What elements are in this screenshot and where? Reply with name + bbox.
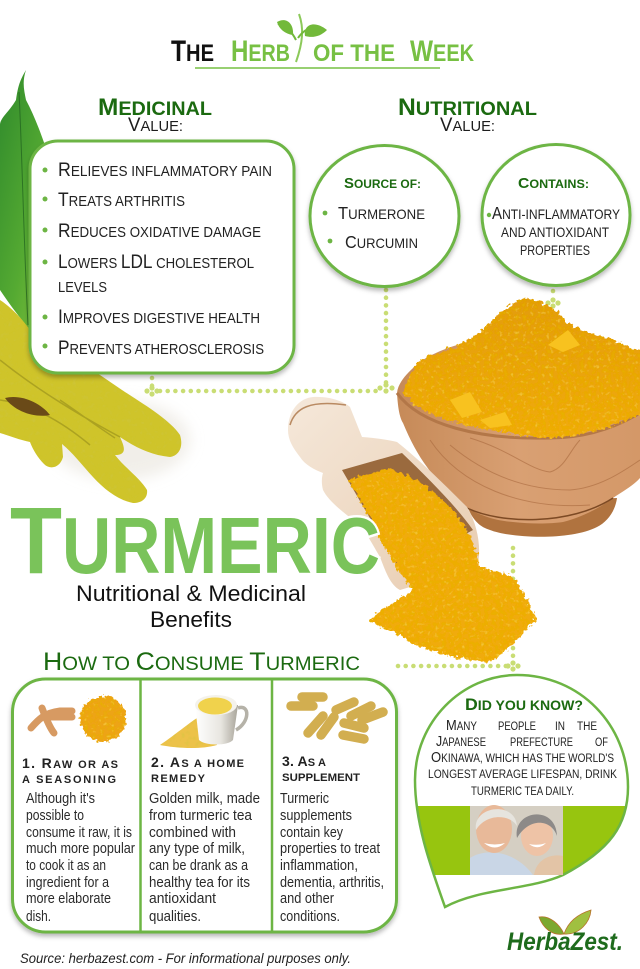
column 2: as a home remedy: any type of milk, (149, 841, 245, 857)
title: The Herb of the Week: THE (171, 35, 214, 68)
column 3: as a supplement: 3. AS A (282, 753, 326, 769)
icon: sprout (277, 14, 327, 62)
panel: medicinal value list: TREATS ARTHRITIS (58, 190, 185, 211)
panel: contains circle (482, 144, 630, 286)
dotted connectors (144, 290, 561, 672)
title: The Herb of the Week: OF THE (313, 40, 395, 67)
column 1: raw or as a seasoning: much more popular (26, 841, 135, 857)
subtitle: Benefits (150, 607, 232, 632)
column 2: as a home remedy: antioxidant (149, 891, 216, 907)
heading: How to Consume Turmeric: HOW TO CONSUME TURMERIC (43, 648, 360, 676)
callout: did you know: PEOPLE (498, 721, 536, 733)
callout: did you know: OF (595, 737, 608, 749)
panel: source of circle: TURMERONE (338, 203, 425, 223)
image: wooden bowl of turmeric (397, 298, 640, 537)
callout: did you know: JAPANESE (436, 733, 486, 750)
panel: source of circle: CURCUMIN (345, 232, 418, 252)
panel: medicinal value list: LEVELS (58, 280, 107, 296)
column 2: as a home remedy: Golden milk, made (149, 791, 260, 807)
panel: medicinal value list: RELIEVES INFLAMMATORY PAIN (58, 160, 272, 181)
panel: medicinal value list: REDUCES OXIDATIVE DAMAGE (58, 221, 261, 242)
logo: HerbaZest (507, 910, 623, 956)
panel: source of circle (310, 146, 459, 286)
image: elderly couple photo (470, 805, 563, 875)
column 1: raw or as a seasoning: dish. (26, 909, 51, 925)
callout: did you know: MANY (446, 717, 477, 734)
callout: did you know: DID YOU KNOW? (465, 695, 583, 714)
title: The Herb of the Week (171, 35, 474, 68)
source note: Source: herbazest.com - For informational purposes only. (20, 950, 351, 966)
column 3: as a supplement: dementia, arthritis, (280, 875, 384, 891)
callout: did you know: TURMERIC TEA DAILY. (471, 786, 574, 798)
column 3: as a supplement: SUPPLEMENT (282, 772, 360, 784)
callout: did you know: IN (555, 721, 565, 733)
subtitle (76, 581, 306, 632)
title: The Herb of the Week: WEEK (410, 35, 474, 68)
panel: how to consume (12, 679, 396, 932)
column 2: as a home remedy: can be drank as a (149, 858, 249, 874)
heading: Medicinal Value (98, 94, 212, 136)
column 3: as a supplement: conditions. (280, 909, 340, 925)
column 1: raw or as a seasoning: A SEASONING (22, 774, 116, 786)
callout: did you know: LONGEST AVERAGE LIFESPAN, DRINK (428, 769, 617, 781)
column 2: as a home remedy: REMEDY (151, 773, 206, 785)
column 1: raw or as a seasoning (22, 696, 135, 925)
column 1: raw or as a seasoning: 1. RAW OR AS (22, 755, 118, 771)
column 1: raw or as a seasoning: consume it raw, it is (26, 825, 132, 841)
image: turmeric root (0, 300, 190, 503)
column 3: as a supplement: and other (280, 891, 334, 907)
column 2: as a home remedy: qualities. (149, 909, 201, 925)
heading: Medicinal Value: MEDICINAL (98, 94, 212, 121)
column 2: as a home remedy: combined with (149, 825, 236, 841)
panel: medicinal value list: IMPROVES DIGESTIVE HEALTH (58, 307, 260, 328)
column 2: as a home remedy: from turmeric tea (149, 808, 253, 824)
panel: medicinal value list: LOWERS LDL CHOLESTEROL (58, 252, 254, 273)
panel: contains circle: CONTAINS: (518, 175, 589, 192)
panel: source of circle: SOURCE OF: (344, 175, 421, 192)
callout: did you know (410, 675, 635, 907)
image: wooden scoop with turmeric (288, 397, 535, 662)
column 3: as a supplement (280, 697, 384, 925)
column 1: raw or as a seasoning: more elaborate (26, 891, 111, 907)
panel: contains circle: AND ANTIOXIDANT (501, 224, 609, 240)
title: The Herb of the Week: HERB (231, 35, 290, 68)
heading: Medicinal Value: VALUE: (128, 115, 183, 136)
logo: HerbaZest: HerbaZest. (507, 928, 623, 956)
column 1: raw or as a seasoning: ingredient for a (26, 875, 110, 891)
column 2: as a home remedy: 2. AS A HOME (151, 754, 244, 770)
column 2: as a home remedy: healthy tea for its (149, 875, 250, 891)
column 1: raw or as a seasoning: to cook it as an (26, 858, 106, 874)
panel: contains circle: PROPERTIES (520, 242, 590, 258)
image: turmeric leaf (0, 70, 60, 330)
title: Turmeric: T (10, 488, 62, 594)
callout: did you know: THE (577, 721, 597, 733)
column 2: as a home remedy (149, 695, 260, 925)
column 3: as a supplement: Turmeric (280, 791, 329, 807)
subtitle: Nutritional & Medicinal (76, 581, 306, 606)
column 1: raw or as a seasoning: possible to (26, 808, 84, 824)
panel: medicinal value list (30, 141, 294, 373)
heading: Nutritional Value (398, 94, 537, 136)
column 3: as a supplement: contain key (280, 825, 344, 841)
panel: medicinal value list: PREVENTS ATHEROSCLEROSIS (58, 338, 264, 359)
heading: Nutritional Value: NUTRITIONAL (398, 94, 537, 121)
heading: Nutritional Value: VALUE: (440, 115, 495, 136)
column 3: as a supplement: properties to treat (280, 841, 380, 857)
title: Turmeric (10, 488, 380, 594)
title: Turmeric: URMERIC (62, 501, 380, 590)
callout: did you know: PREFECTURE (510, 737, 573, 749)
column 1: raw or as a seasoning: Although it's (26, 791, 95, 807)
column 3: as a supplement: inflammation, (280, 858, 358, 874)
column 3: as a supplement: supplements (280, 808, 352, 824)
callout: did you know: OKINAWA, WHICH HAS THE WORLD'S (431, 749, 614, 766)
panel: contains circle: ANTI-INFLAMMATORY (492, 203, 621, 223)
